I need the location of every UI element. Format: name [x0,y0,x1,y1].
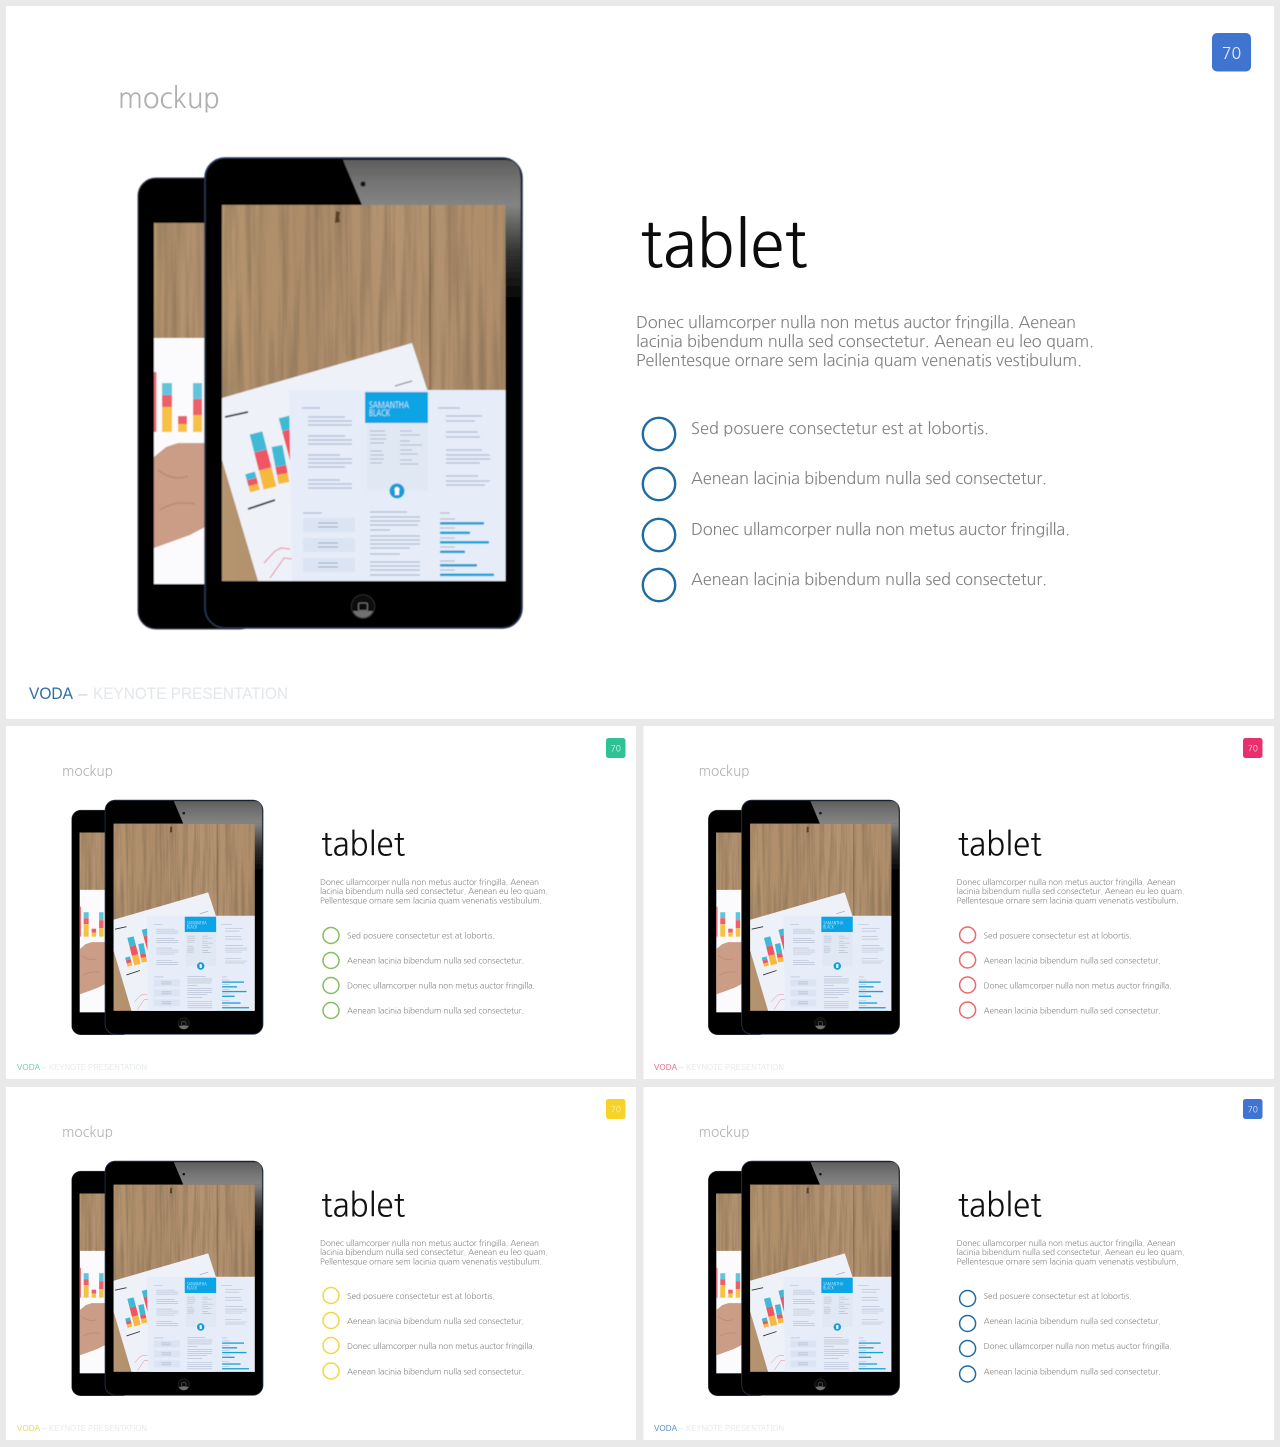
tablet mockup image [72,800,263,1035]
bullet list: Aenean lacinia bibendum nulla sed consectetur. [347,1006,524,1016]
bullet list: Sed posuere consectetur est at lobortis. [347,1292,495,1301]
footer: VODA [654,1423,677,1433]
bullet list: Donec ullamcorper nulla non metus auctor fringilla. [984,982,1172,990]
title: tablet: tablet [640,213,807,277]
bullet list: Sed posuere consectetur est at lobortis. [691,421,989,437]
section label: mockup: mockup [699,1125,750,1140]
bullet list: Donec ullamcorper nulla non metus auctor fringilla. [347,1342,535,1351]
tablet mockup image [72,1161,263,1396]
tablet mockup image [138,158,522,629]
bullet list: Donec ullamcorper nulla non metus auctor fringilla. [347,982,535,990]
body paragraph [320,878,548,906]
body paragraph: lacinia bibendum nulla sed consectetur. Aenean eu leo quam. [636,334,1094,350]
panel: yellow slide [6,1087,636,1440]
bullet list: Aenean lacinia bibendum nulla sed consectetur. [347,956,524,966]
footer: VODA [17,1062,40,1072]
title: tablet: tablet [321,828,405,860]
footer: VODA [29,684,74,703]
footer: – [78,684,88,703]
body paragraph: Pellentesque ornare sem lacinia quam venenatis vestibulum. [957,896,1179,906]
body paragraph: Donec ullamcorper nulla non metus auctor fringilla. Aenean [957,1239,1176,1248]
tablet mockup image [708,800,900,1035]
bullet list: Aenean lacinia bibendum nulla sed consectetur. [984,1368,1161,1376]
footer: – [679,1423,684,1433]
footer: KEYNOTE PRESENTATION [49,1062,147,1072]
bullet list [960,1290,1172,1382]
page number badge [606,738,626,758]
page number badge: 70 [1222,46,1241,62]
page number badge [1243,738,1262,758]
body paragraph [957,1239,1185,1266]
bullet list: Aenean lacinia bibendum nulla sed consectetur. [691,471,1047,487]
body paragraph [636,315,1094,369]
bullet list: Sed posuere consectetur est at lobortis. [984,1292,1132,1301]
footer: KEYNOTE PRESENTATION [49,1423,147,1433]
bullet list: Aenean lacinia bibendum nulla sed consectetur. [984,956,1161,966]
footer: KEYNOTE PRESENTATION [93,684,288,703]
page number badge: 70 [1248,1106,1258,1114]
bullet list [960,927,1172,1018]
body paragraph: lacinia bibendum nulla sed consectetur. Aenean eu leo quam. [957,1248,1185,1257]
body paragraph: Donec ullamcorper nulla non metus auctor fringilla. Aenean [320,878,539,887]
bullet list [643,418,1070,601]
bullet list: Aenean lacinia bibendum nulla sed consectetur. [984,1006,1161,1016]
page number badge [1212,33,1251,72]
body paragraph: lacinia bibendum nulla sed consectetur. Aenean eu leo quam. [320,1248,548,1257]
page number badge [606,1099,626,1119]
footer: – [679,1062,684,1072]
footer: KEYNOTE PRESENTATION [686,1423,784,1433]
body paragraph [320,1239,548,1266]
footer: – [42,1062,47,1072]
bullet list: Aenean lacinia bibendum nulla sed consectetur. [347,1368,524,1376]
bullet list [323,928,535,1018]
footer: VODA [654,1062,677,1072]
panel: green slide [6,726,636,1079]
title: tablet: tablet [958,828,1042,860]
body paragraph: Pellentesque ornare sem lacinia quam venenatis vestibulum. [636,353,1082,369]
body paragraph: lacinia bibendum nulla sed consectetur. Aenean eu leo quam. [957,887,1185,896]
body paragraph: Pellentesque ornare sem lacinia quam venenatis vestibulum. [320,896,542,906]
bullet list: Donec ullamcorper nulla non metus auctor fringilla. [691,522,1070,538]
panel: main blue slide [6,6,1274,719]
body paragraph: Donec ullamcorper nulla non metus auctor fringilla. Aenean [957,878,1176,887]
bullet list: Donec ullamcorper nulla non metus auctor fringilla. [984,1342,1172,1351]
page number badge: 70 [611,1106,621,1114]
body paragraph: lacinia bibendum nulla sed consectetur. Aenean eu leo quam. [320,887,548,896]
bullet list: Sed posuere consectetur est at lobortis. [984,932,1132,940]
bullet list [323,1288,535,1379]
bullet list: Sed posuere consectetur est at lobortis. [347,932,495,940]
title: tablet: tablet [321,1190,405,1222]
page number badge: 70 [611,744,621,754]
panel: pink slide [644,726,1274,1079]
body paragraph: Donec ullamcorper nulla non metus auctor fringilla. Aenean [636,315,1076,331]
footer: – [42,1423,47,1433]
body paragraph: Pellentesque ornare sem lacinia quam venenatis vestibulum. [957,1258,1179,1266]
page number badge: 70 [1248,744,1258,754]
section label: mockup: mockup [699,764,750,779]
footer [29,684,288,703]
footer: VODA [17,1423,40,1433]
title: tablet: tablet [958,1190,1042,1222]
footer: KEYNOTE PRESENTATION [686,1062,784,1072]
tablet mockup image [708,1161,900,1396]
body paragraph: Donec ullamcorper nulla non metus auctor fringilla. Aenean [320,1239,539,1248]
panel: blue slide [644,1087,1274,1440]
section label: mockup: mockup [62,764,113,779]
bullet list: Aenean lacinia bibendum nulla sed consectetur. [984,1317,1161,1326]
page number badge [1243,1099,1262,1119]
body paragraph: Pellentesque ornare sem lacinia quam venenatis vestibulum. [320,1258,542,1266]
bullet list: Aenean lacinia bibendum nulla sed consectetur. [691,572,1047,588]
section label: mockup: mockup [62,1125,113,1140]
section label: mockup: mockup [118,84,220,113]
bullet list: Aenean lacinia bibendum nulla sed consectetur. [347,1317,524,1326]
body paragraph [957,878,1185,906]
